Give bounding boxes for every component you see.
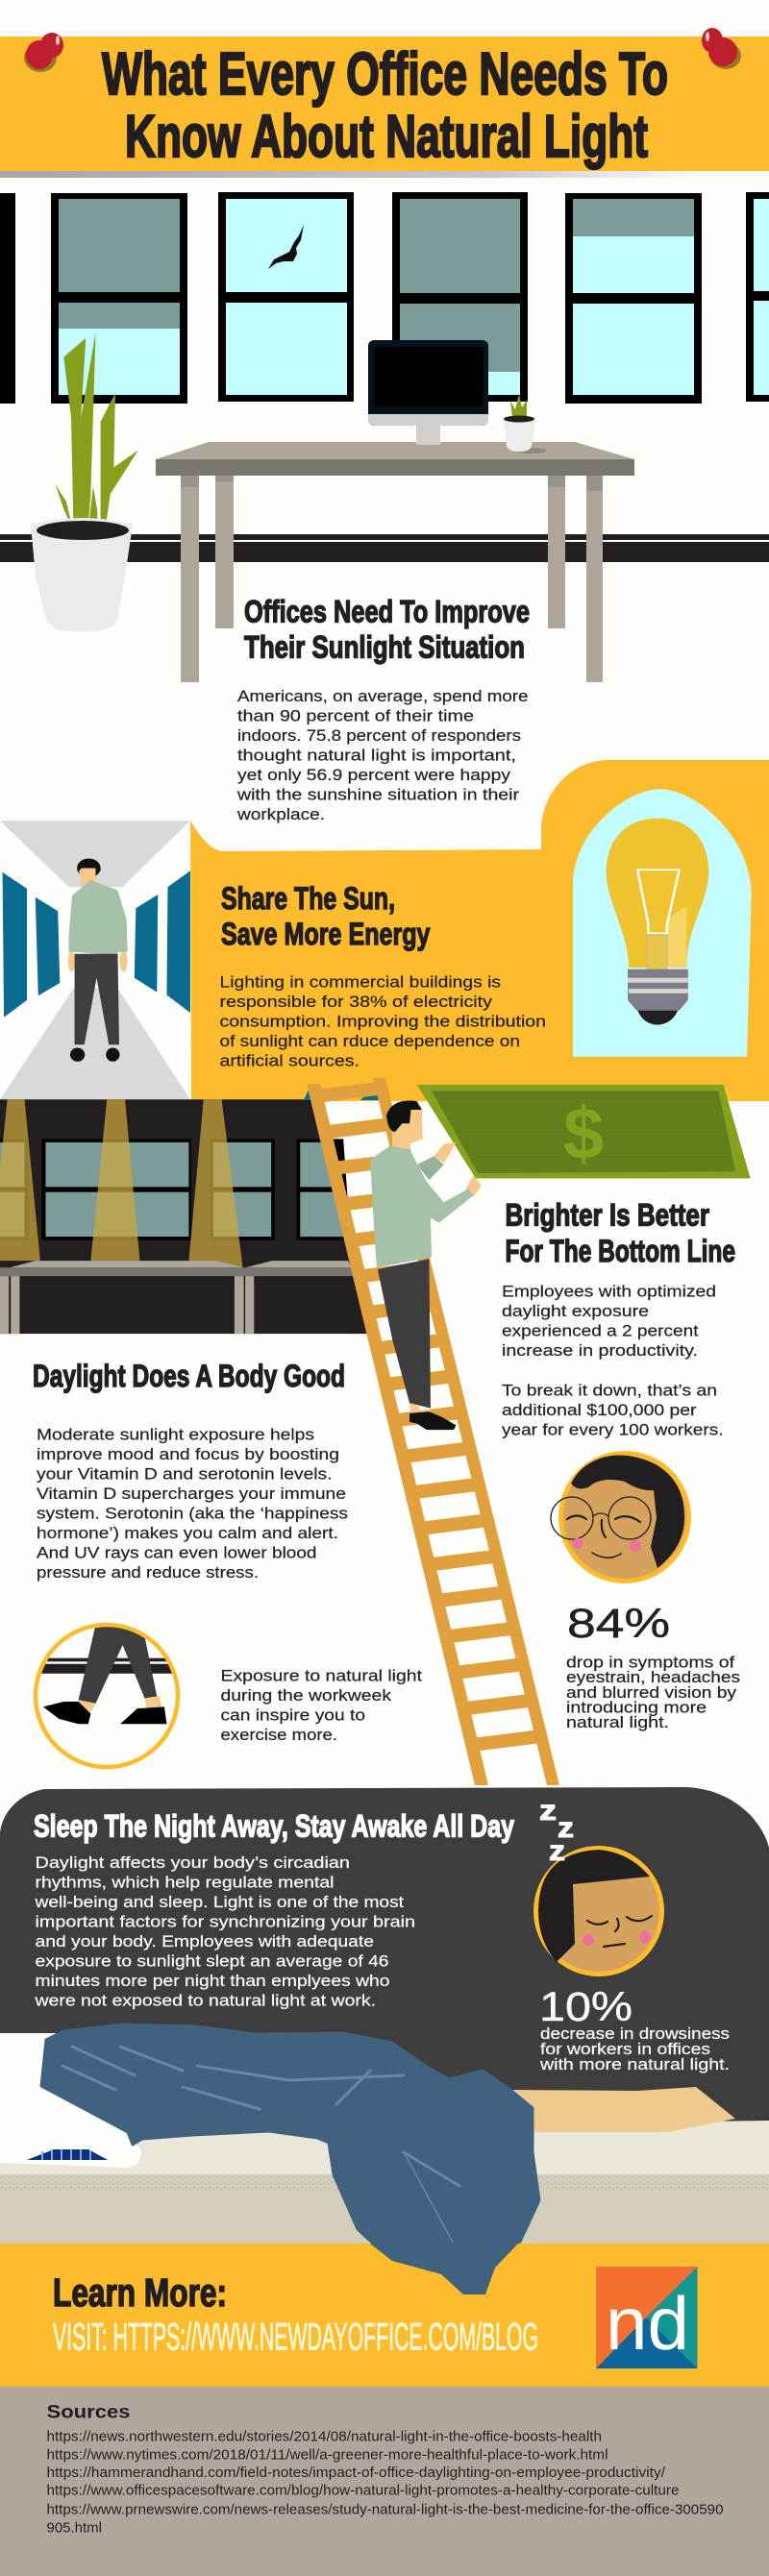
callout: exercise text: during the workweek	[221, 1686, 392, 1705]
office scene: windows	[0, 192, 769, 404]
body text: year for every 100 workers.	[502, 1420, 723, 1439]
section: daylight does a body good	[33, 1359, 348, 1582]
sources heading: Sources	[46, 2402, 131, 2423]
stat description: with more natural light.	[539, 2055, 730, 2073]
body text: daylight exposure	[502, 1302, 649, 1320]
heading	[221, 881, 431, 951]
stat description: eyestrain, headaches	[566, 1668, 740, 1686]
body text: workplace.	[236, 805, 325, 823]
icon: sleeping face	[533, 1846, 664, 1976]
body text: important factors for synchronizing your brain	[35, 1912, 415, 1931]
illustration: light bulb	[573, 789, 752, 1057]
stat description: and blurred vision by	[566, 1683, 737, 1702]
body text: were not exposed to natural light at work.	[34, 1991, 376, 2010]
heading: Share The Sun,	[221, 881, 395, 916]
body text	[219, 972, 546, 1070]
yellow energy panel	[190, 760, 769, 1101]
heading: Offices Need To Improve	[244, 594, 530, 628]
floor plant	[31, 332, 138, 631]
stat description: natural light.	[566, 1713, 669, 1731]
body text	[37, 1426, 348, 1582]
heading: Sleep The Night Away, Stay Awake All Day	[34, 1808, 514, 1843]
body text: improve mood and focus by boosting	[37, 1445, 339, 1463]
source links	[46, 2429, 723, 2537]
icon: left push pin	[24, 33, 63, 72]
window 4	[565, 193, 702, 404]
heading	[506, 1197, 735, 1268]
icon: sleeping zzz: z	[549, 1835, 565, 1867]
illustration: blanket	[41, 2024, 539, 2294]
body text: Moderate sunlight exposure helps	[37, 1426, 314, 1443]
body text: And UV rays can even lower blood	[37, 1543, 317, 1562]
body text: Employees with optimized	[502, 1282, 716, 1301]
body text: yet only 56.9 percent were happy	[237, 766, 511, 784]
callout: exercise text: can inspire you to	[221, 1706, 365, 1724]
body text	[34, 1853, 415, 2010]
stat: 10 percent: 10%	[539, 1984, 633, 2030]
panel: sleep section background	[0, 1787, 769, 2123]
body text: pressure and reduce stress.	[37, 1563, 259, 1582]
source links: https://news.northwestern.edu/stories/2014/08/natural-light-in-the-office-boosts-health	[46, 2429, 602, 2444]
body text: system. Serotonin (aka the ‘happiness	[37, 1505, 348, 1522]
callout: exercise text: Exposure to natural light	[221, 1666, 422, 1685]
stat description	[539, 2024, 730, 2073]
heading: Daylight Does A Body Good	[33, 1359, 345, 1393]
illustration: corridor with man	[0, 821, 190, 1101]
body text	[502, 1282, 723, 1439]
body text: additional $100,000 per	[502, 1401, 697, 1419]
stat: 84 percent	[566, 1601, 740, 1731]
callout: exercise text: exercise more.	[221, 1726, 337, 1744]
body text: responsible for 38% of electricity	[219, 993, 493, 1011]
bed surface	[0, 2033, 769, 2244]
body text: and your body. Employees with adequate	[35, 1932, 374, 1950]
body text: hormone’) makes you calm and alert.	[37, 1524, 338, 1542]
illustration: money bill	[417, 1085, 751, 1178]
body text: indoors. 75.8 percent of responders	[237, 726, 521, 745]
panel: sources	[0, 2387, 769, 2576]
callout: exercise text	[221, 1666, 422, 1744]
learn more text: Learn More:	[53, 2270, 227, 2315]
illustration: man on ladder	[370, 1100, 482, 1430]
heading: Brighter Is Better	[506, 1197, 709, 1232]
section: brighter is better	[502, 1197, 735, 1439]
heading: Save More Energy	[221, 917, 431, 951]
source links: https://www.nytimes.com/2018/01/11/well/a-greener-more-healthful-place-to-work.html	[46, 2446, 608, 2464]
money bill dollar sign: $	[563, 1093, 604, 1175]
section: share the sun	[219, 881, 546, 1070]
stat description	[566, 1653, 740, 1731]
body text: your Vitamin D and serotonin levels.	[37, 1464, 333, 1484]
window 1	[51, 193, 187, 404]
body text: thought natural light is important,	[237, 746, 516, 765]
stat: 10 percent	[539, 1984, 730, 2073]
icon: walking legs	[35, 1625, 182, 1767]
stat description: introducing more	[566, 1699, 707, 1716]
body text: experienced a 2 percent	[502, 1322, 699, 1339]
title	[102, 41, 668, 170]
icon: smiling face with glasses	[551, 1451, 691, 1583]
desk	[156, 442, 634, 682]
body text	[236, 687, 529, 823]
window 5	[746, 192, 769, 402]
illustration: blue ladder shadows	[304, 1081, 381, 1100]
heading: Their Sunlight Situation	[244, 630, 525, 665]
icon: right push pin	[702, 28, 741, 69]
body text: artificial sources.	[219, 1051, 360, 1070]
icon: sleeping zzz	[539, 1795, 574, 1867]
computer monitor	[368, 340, 488, 445]
section: offices need to improve	[236, 594, 530, 823]
illustration: dark office with windows and desks	[0, 1099, 369, 1334]
title banner	[0, 28, 769, 178]
icon: newdayoffice logo	[596, 2267, 698, 2368]
section: sleep the night away	[34, 1808, 514, 2010]
source links: https://www.prnewswire.com/news-releases/study-natural-light-is-the-best-medicine-for-the-office-300590	[46, 2502, 723, 2517]
body text: Americans, on average, spend more	[237, 687, 529, 705]
blanket tail over learn more	[370, 2242, 520, 2294]
body text: consumption. Improving the distribution	[219, 1013, 546, 1030]
body text: Daylight affects your body’s circadian	[35, 1853, 350, 1872]
body text: well-being and sleep. Light is one of the most	[34, 1893, 404, 1911]
body text: rhythms, which help regulate mental	[35, 1874, 335, 1891]
body text: To break it down, that’s an	[502, 1382, 717, 1399]
illustration: foot	[509, 2087, 735, 2132]
icon: sleeping zzz: z	[558, 1812, 574, 1844]
body text: with the sunshine situation in their	[236, 786, 519, 803]
body text: Vitamin D supercharges your immune	[37, 1484, 346, 1503]
stat description: for workers in offices	[540, 2040, 710, 2058]
body text: increase in productivity.	[502, 1341, 698, 1360]
illustration: pillow	[0, 2033, 141, 2168]
source links: https://www.officespacesoftware.com/blog/how-natural-light-promotes-a-healthy-corporate-culture	[46, 2483, 679, 2498]
icon: sleeping zzz: z	[539, 1795, 557, 1827]
desk plant	[504, 394, 546, 454]
body text: Lighting in commercial buildings is	[219, 972, 501, 992]
body text: of sunlight can rduce dependence on	[219, 1032, 520, 1050]
source links: https://hammerandhand.com/field-notes/impact-of-office-daylighting-on-employee-productivity/	[46, 2465, 666, 2481]
stat description: drop in symptoms of	[566, 1653, 734, 1672]
heading	[244, 594, 530, 665]
body text: than 90 percent of their time	[237, 707, 474, 724]
source links: 905.html	[46, 2519, 102, 2537]
illustration: ladder	[307, 1078, 559, 1785]
stat description: decrease in drowsiness	[540, 2024, 730, 2043]
panel: learn more	[0, 2244, 769, 2387]
window 3	[392, 192, 528, 402]
learn more text	[53, 2270, 538, 2358]
window 2 with bird	[218, 192, 354, 402]
baseboard	[0, 534, 769, 562]
icon: newdayoffice logo: nd	[606, 2281, 689, 2366]
stat: 84 percent: 84%	[567, 1601, 670, 1647]
body text: minutes more per night than emplyees who	[35, 1972, 390, 1990]
body text: exposure to sunlight slept an average of 46	[35, 1952, 388, 1970]
